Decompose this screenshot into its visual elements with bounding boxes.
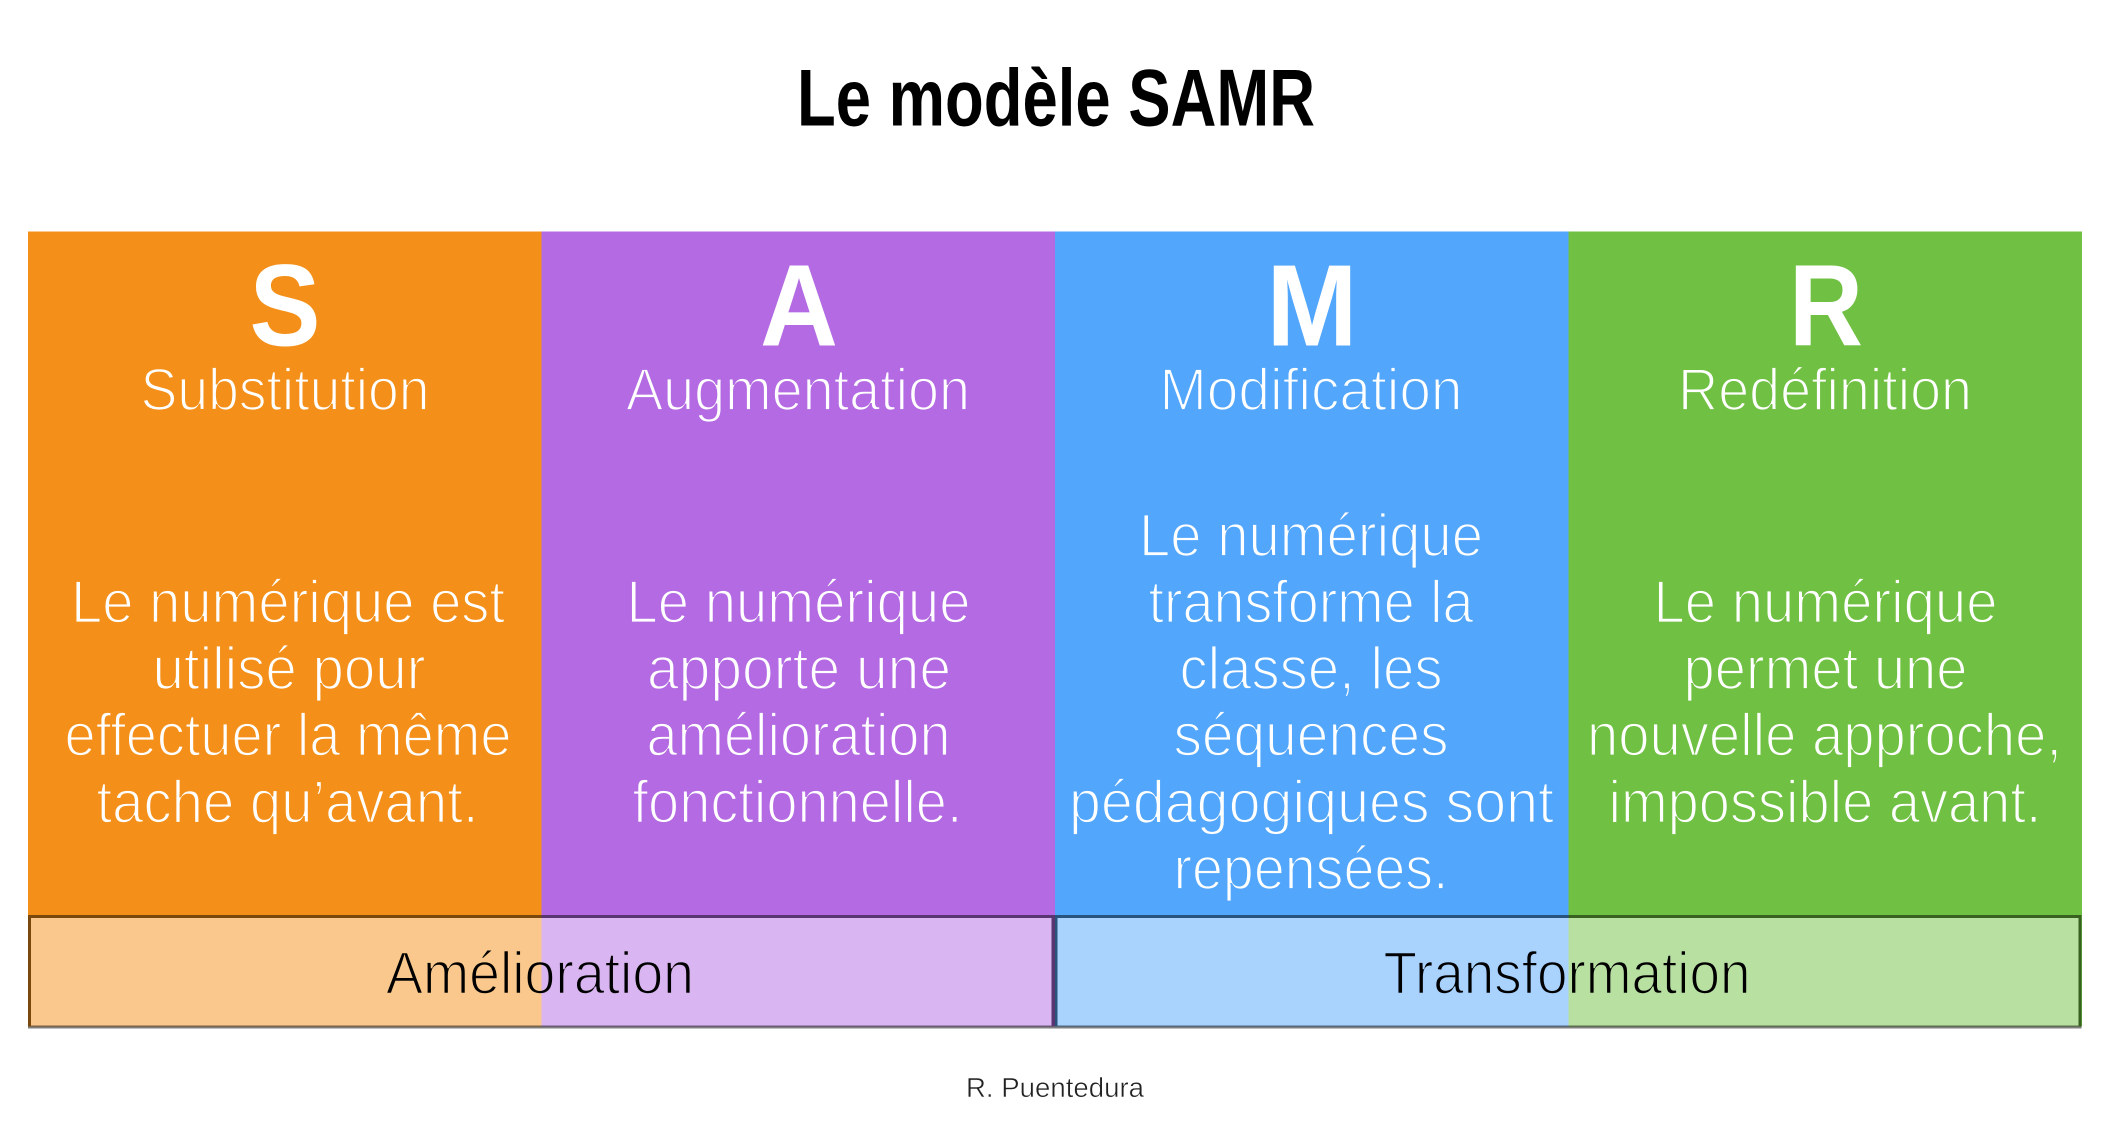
heading: Substitution: Substitution — [140, 357, 430, 423]
text block: Augmentation description: amélioration — [646, 702, 950, 768]
heading: Modification: Modification — [1160, 357, 1462, 423]
text block: Modification description — [1069, 502, 1554, 902]
text block: Substitution description — [64, 568, 512, 836]
text block: Augmentation description: fonctionnelle. — [632, 768, 962, 836]
text block: Modification description: Le numérique — [1139, 502, 1483, 569]
text block: Modification description: transforme la — [1148, 568, 1474, 636]
text block: Redéfinition description: permet une — [1684, 635, 1968, 702]
text block: Substitution description: tache qu’avant. — [96, 768, 478, 836]
text block: Substitution description: effectuer la même — [64, 702, 512, 768]
letter R: R — [1789, 240, 1863, 370]
letter A: A — [760, 240, 838, 370]
heading: Augmentation: Augmentation — [626, 357, 970, 423]
heading: Redéfinition: Redéfinition — [1678, 357, 1972, 423]
letter S: S — [250, 240, 320, 370]
text block: Modification description: classe, les — [1180, 635, 1442, 702]
attribution: R. Puentedura — [966, 1072, 1145, 1103]
text block: Modification description: pédagogiques sont — [1069, 768, 1554, 836]
text block: Substitution description: Le numérique est — [71, 568, 505, 636]
label: Amélioration: Amélioration — [386, 940, 694, 1006]
panel: Modification — [1055, 232, 1568, 1026]
label: Transformation: Transformation — [1384, 940, 1750, 1006]
text block: Redéfinition description: nouvelle approche, — [1587, 702, 2062, 768]
text block: Redéfinition description: impossible avant. — [1608, 768, 2042, 836]
letter M: M — [1266, 240, 1358, 370]
text block: Redéfinition description: Le numérique — [1654, 568, 1998, 636]
band: Amélioration — [30, 916, 1053, 1027]
panel: Redéfinition — [1568, 232, 2082, 1026]
text block: Augmentation description: Le numérique — [626, 568, 970, 636]
text block: Augmentation description: apporte une — [647, 635, 951, 702]
text block: Modification description: séquences — [1174, 702, 1448, 768]
text block: Augmentation description — [626, 568, 970, 836]
title: Le modèle SAMR — [797, 54, 1315, 144]
text block: Substitution description: utilisé pour — [152, 635, 426, 702]
panel: Augmentation — [542, 232, 1055, 1026]
text block: Redéfinition description — [1587, 568, 2062, 836]
text block: Modification description: repensées. — [1174, 835, 1448, 902]
panel: Substitution — [28, 232, 542, 1026]
band: Transformation — [1056, 916, 2080, 1027]
